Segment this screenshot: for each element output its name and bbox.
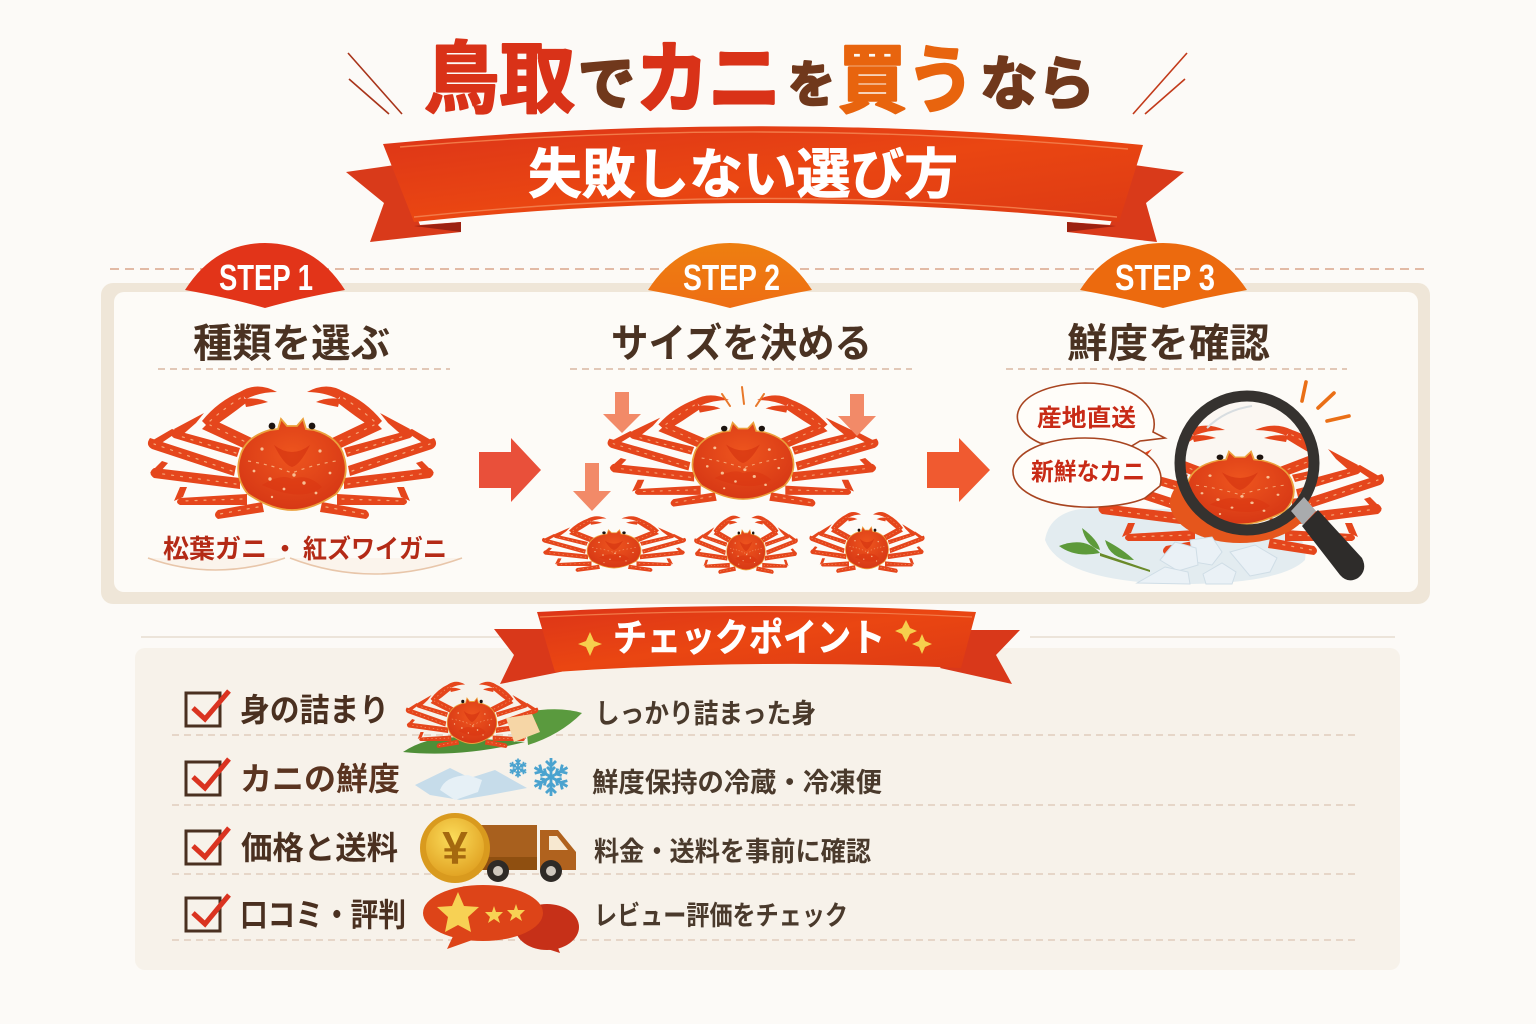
- title accent lines left: [348, 53, 402, 114]
- row description: 料金・送料を事前に確認: [594, 837, 871, 867]
- title text: を: を: [788, 57, 835, 113]
- step 1 heading: 種類を選ぶ: [193, 322, 390, 366]
- small crab left: [542, 516, 686, 572]
- size emphasis marks: [722, 387, 764, 406]
- step 1 labels: 松葉ガニ: [163, 534, 267, 564]
- ribbon label: チェックポイント: [613, 618, 885, 660]
- title accent lines right: [1133, 53, 1187, 114]
- checkbox: [186, 759, 229, 795]
- small crab right: [809, 512, 925, 573]
- ribbon tail right: [1067, 165, 1184, 242]
- step 2 badge: [648, 243, 812, 308]
- row description: しっかり詰まった身: [595, 699, 816, 729]
- size arrows: [573, 392, 876, 511]
- row 1: 身の詰まり: [186, 682, 816, 754]
- large crab: [608, 395, 878, 507]
- checkbox: [186, 895, 229, 931]
- star left: [578, 632, 602, 656]
- step 1 crab illustration: [148, 386, 436, 519]
- ribbon centre: [537, 606, 976, 672]
- icon: back bubble: [515, 904, 579, 953]
- icon: yen coin: ¥: [442, 822, 468, 874]
- checkbox: [186, 691, 229, 726]
- step 2 heading: サイズを決める: [611, 322, 872, 366]
- title text: 鳥取: 鳥取: [424, 35, 575, 123]
- title: [424, 35, 1095, 123]
- icon: truck: [478, 825, 576, 882]
- title text: なら: なら: [980, 52, 1095, 117]
- row label: 身の詰まり: [240, 692, 389, 728]
- step 3 badge: [1080, 243, 1247, 308]
- handle: [1302, 510, 1364, 580]
- ring: [1180, 396, 1314, 530]
- crab legs under magnifier: [1096, 449, 1384, 555]
- row label: 価格と送料: [241, 830, 398, 866]
- icon: front bubble: [423, 885, 543, 949]
- main ribbon: [346, 126, 1184, 242]
- row dividers: [172, 735, 1358, 940]
- speech bubble: 新鮮なカニ: [1013, 438, 1161, 507]
- ferrule: [1291, 497, 1316, 525]
- row 4: 口コミ・評判: [186, 885, 848, 953]
- icon: small snowflake: [509, 758, 527, 778]
- icon: stars: [437, 892, 525, 932]
- arrow: step 2 to step 3: [927, 438, 990, 502]
- ribbon tail left: [346, 165, 461, 242]
- icon: ice: [415, 768, 527, 800]
- panel: check points: [135, 648, 1400, 970]
- icon: crab on leaf: [403, 682, 582, 754]
- step 3 badge: STEP 3: [1115, 257, 1215, 298]
- row label: 口コミ・評判: [240, 897, 406, 933]
- step 1 labels: [148, 534, 462, 574]
- dashed line behind steps: [110, 268, 1425, 270]
- check section rules: [141, 636, 1395, 638]
- step 1 badge: STEP 1: [219, 257, 313, 298]
- row 3: 価格と送料: [186, 813, 871, 883]
- ribbon body: [383, 126, 1143, 222]
- panel: steps: [101, 283, 1430, 604]
- leaves: [1059, 528, 1150, 572]
- speech bubble: 新鮮なカニ: 新鮮なカニ: [1031, 459, 1145, 486]
- title text: で: で: [578, 52, 635, 117]
- step 1 labels: 紅ズワイガニ: [303, 534, 447, 564]
- ice rocks: [1137, 537, 1277, 584]
- icon: yen coin: [420, 813, 490, 883]
- ribbon heading: 失敗しない選び方: [528, 145, 958, 205]
- title text: カニ: カニ: [636, 35, 781, 123]
- step 3 illustration: [1045, 449, 1384, 584]
- speech bubble: 産地直送: 産地直送: [1037, 405, 1136, 432]
- checkbox: [186, 828, 229, 864]
- check point ribbon: [494, 606, 1020, 684]
- attention marks: [1302, 382, 1349, 421]
- step 1 badge: [185, 243, 345, 308]
- title text: 買う: 買う: [838, 39, 975, 122]
- row 2: カニの鮮度: [186, 758, 882, 800]
- lens: [1185, 401, 1309, 525]
- arrow: step 1 to step 2: [479, 438, 541, 502]
- ice plate: [1045, 508, 1305, 584]
- step 1 labels: ・: [272, 534, 298, 564]
- step 2 crabs: [542, 395, 925, 574]
- heading dividers: [158, 368, 1347, 370]
- icon: snowflake: [532, 758, 570, 796]
- step 3 heading: 鮮度を確認: [1067, 322, 1270, 366]
- row description: レビュー評価をチェック: [594, 901, 848, 931]
- step 2 badge: STEP 2: [683, 257, 780, 298]
- small crab centre: [694, 516, 798, 574]
- magnifying glass: [1174, 390, 1364, 580]
- row description: 鮮度保持の冷蔵・冷凍便: [592, 768, 882, 798]
- speech bubble: 産地直送: [1017, 383, 1165, 450]
- row label: カニの鮮度: [240, 761, 400, 797]
- stars right: [895, 620, 932, 654]
